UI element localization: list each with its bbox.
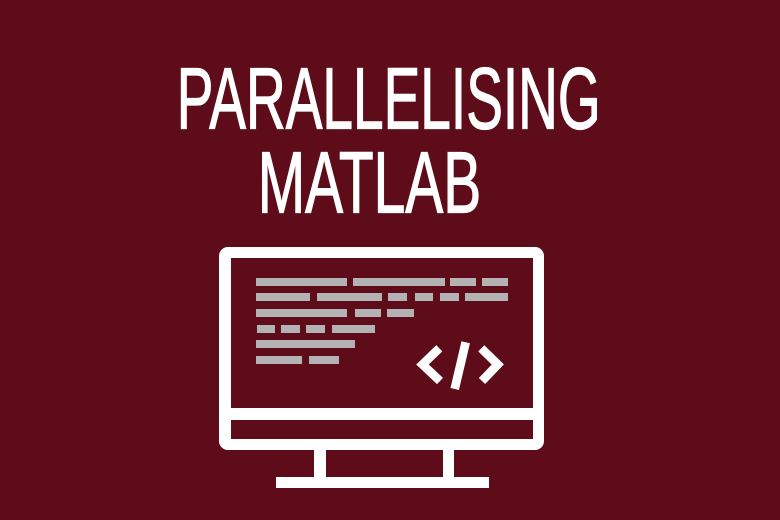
icon: code brackets bbox=[422, 342, 498, 389]
icon: computer monitor bbox=[219, 247, 544, 488]
monitor frame bbox=[219, 247, 544, 450]
title bbox=[177, 50, 601, 232]
code lines bbox=[256, 278, 508, 364]
monitor stand bbox=[276, 450, 489, 488]
title line 2: MATLAB bbox=[258, 134, 481, 232]
